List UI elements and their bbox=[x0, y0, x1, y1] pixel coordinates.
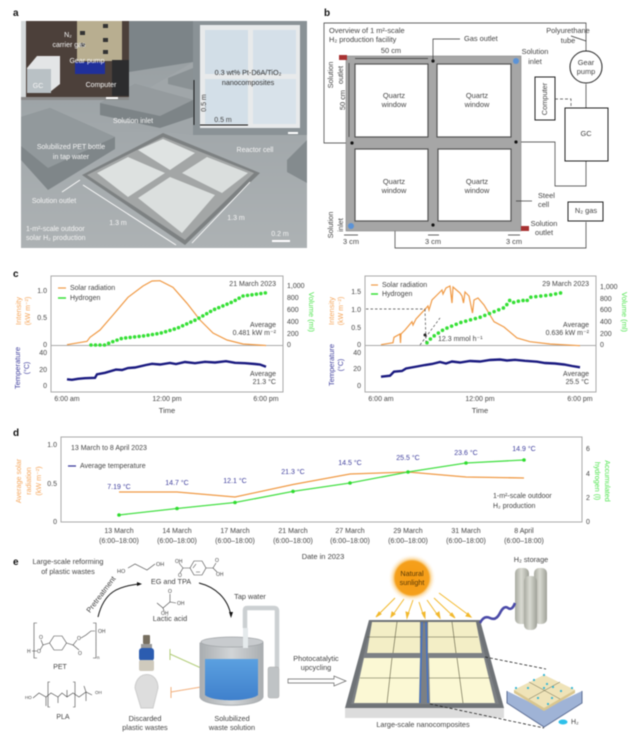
TPA molecule: OH bbox=[175, 559, 183, 565]
annotations: 21.3 °C bbox=[253, 378, 276, 386]
sun bbox=[388, 554, 436, 602]
inset: nanocomposite panel bbox=[193, 21, 307, 135]
annotations: Average temperature bbox=[80, 463, 146, 470]
labels: Quartz bbox=[383, 177, 405, 186]
inset: nanocomposite panel: 0.3 wt% Pt-D6A/TiO₂ bbox=[215, 68, 282, 77]
axes ticks: 1,000 bbox=[600, 284, 618, 291]
labels: 3 cm bbox=[506, 237, 522, 246]
temperature labels: 21.3 °C bbox=[281, 468, 305, 476]
panel b label: b bbox=[324, 8, 330, 19]
nanocomposite detail bbox=[507, 674, 582, 727]
labels: window bbox=[464, 100, 490, 109]
axes ticks: Time bbox=[472, 406, 488, 415]
PET structure: H bbox=[27, 649, 31, 655]
axes ticks: 6:00 pm bbox=[253, 396, 279, 403]
PLA structure: HO bbox=[25, 695, 32, 700]
gear pump: Gear bbox=[578, 58, 595, 67]
axes ticks: 27 March bbox=[335, 528, 365, 535]
PET structure: O bbox=[39, 635, 43, 641]
labels: Quartz bbox=[466, 177, 488, 186]
axes ticks: 400 bbox=[600, 319, 612, 326]
GC box: GC bbox=[580, 129, 592, 138]
annotations bbox=[58, 281, 277, 386]
annotations bbox=[371, 281, 590, 386]
annotations: Average bbox=[563, 322, 589, 329]
axes ticks: 0 bbox=[287, 342, 291, 349]
PET structure: O bbox=[37, 649, 41, 655]
inset: nanocomposite panel: 0.5 m bbox=[214, 117, 232, 124]
labels: 50 cm bbox=[381, 46, 401, 55]
axes ticks: 800 bbox=[600, 296, 612, 303]
annotations: 12.3 mmol h⁻¹ bbox=[438, 336, 483, 343]
annotations: 25.5 °C bbox=[566, 378, 589, 386]
axes ticks: (°C) bbox=[23, 362, 31, 374]
axes ticks: Temperature bbox=[13, 347, 22, 389]
axes ticks: 40 bbox=[353, 350, 361, 357]
annotations: Average bbox=[563, 371, 589, 378]
axes ticks: 21 March bbox=[278, 528, 308, 535]
photo labels: 1.3 m bbox=[227, 215, 245, 222]
annotations: Hydrogen bbox=[70, 295, 100, 302]
panel e: process scheme: H₂ storage bbox=[514, 555, 548, 564]
temperature labels: 7.19 °C bbox=[107, 483, 131, 491]
temperature trace bbox=[381, 360, 580, 377]
N2 gas box bbox=[568, 202, 603, 221]
arrow to solution bbox=[199, 583, 233, 618]
labels: Quartz bbox=[383, 91, 405, 100]
axes ticks: Intensity bbox=[14, 297, 23, 325]
labels bbox=[326, 26, 590, 246]
chart: daily averages bbox=[14, 437, 612, 561]
annotations: H₂ production bbox=[493, 503, 536, 510]
axes ticks: 600 bbox=[600, 307, 612, 314]
concrete blocks bbox=[21, 68, 307, 190]
axes ticks: 29 March bbox=[393, 528, 423, 535]
hollow arrow bbox=[288, 676, 346, 686]
computer box: Computer bbox=[540, 82, 549, 115]
axes ticks: 12:00 pm bbox=[465, 396, 495, 403]
axes ticks: Average solar bbox=[14, 458, 23, 503]
axes ticks: (6:00–18:00) bbox=[504, 538, 544, 545]
temperature labels: 12.1 °C bbox=[223, 477, 247, 485]
photo labels: 0.2 m bbox=[271, 231, 289, 238]
sun: sunlight bbox=[400, 578, 424, 587]
photo labels: 1.3 m bbox=[109, 220, 127, 227]
axes ticks: 400 bbox=[287, 319, 299, 326]
photo labels: solar H₂ production bbox=[26, 235, 86, 242]
axes ticks: 12:00 pm bbox=[152, 396, 182, 403]
photo labels: 1-m²-scale outdoor bbox=[26, 226, 85, 233]
axes ticks: 20 bbox=[39, 367, 47, 374]
solar radiation curve bbox=[67, 281, 266, 346]
labels: Solution bbox=[326, 212, 335, 238]
axes ticks: 8 April bbox=[514, 528, 534, 535]
solar line bbox=[119, 472, 524, 497]
panel e: process scheme: Discarded bbox=[129, 714, 161, 723]
H2 storage tanks bbox=[515, 568, 547, 630]
H2 legend: H₂ bbox=[571, 719, 579, 726]
axes ticks: 600 bbox=[287, 307, 299, 314]
axes ticks: Temperature bbox=[327, 344, 336, 386]
zoom dashes bbox=[430, 657, 546, 728]
axes ticks: 0 bbox=[43, 342, 47, 349]
EG molecule bbox=[117, 562, 164, 575]
axes ticks: Intensity bbox=[327, 297, 336, 325]
sun: Natural bbox=[400, 569, 424, 578]
lactic acid molecule bbox=[157, 589, 185, 617]
axes ticks: 1,000 bbox=[287, 283, 305, 290]
steel frame with panes bbox=[82, 133, 260, 245]
panel e: process scheme: Lactic acid bbox=[153, 614, 187, 623]
EG molecule: OH bbox=[156, 562, 164, 568]
GC box bbox=[565, 108, 608, 161]
axes ticks: 17 March bbox=[220, 528, 250, 535]
steel cell bbox=[346, 56, 521, 231]
labels: Solution bbox=[531, 219, 557, 228]
axes ticks: (°C) bbox=[337, 359, 345, 371]
labels: tube bbox=[561, 36, 575, 45]
axes ticks: 0 bbox=[586, 519, 590, 526]
lactic acid molecule: OH bbox=[177, 601, 185, 607]
axes ticks: 800 bbox=[287, 295, 299, 302]
chart: 21 March 2023 bbox=[13, 276, 316, 415]
temperature labels: 14.9 °C bbox=[512, 445, 536, 453]
axes ticks: 4 bbox=[586, 471, 590, 478]
axes ticks: Accumulated bbox=[603, 460, 612, 502]
axes ticks: 0 bbox=[43, 383, 47, 390]
axes ticks bbox=[13, 283, 316, 415]
labels: Steel bbox=[538, 191, 555, 200]
PET structure: O bbox=[77, 636, 81, 642]
PET structure: O bbox=[78, 651, 82, 657]
axes ticks: 0.5 bbox=[351, 325, 361, 332]
inset: gas chromatography setup: carrier gas bbox=[52, 42, 86, 49]
panel e label: e bbox=[13, 557, 19, 568]
axes ticks bbox=[327, 284, 629, 415]
axes ticks: 6 bbox=[586, 446, 590, 453]
axes ticks: (kW m⁻²) bbox=[34, 466, 43, 496]
PLA structure bbox=[25, 682, 102, 707]
axes ticks: 1.5 bbox=[351, 289, 361, 296]
panel e: process scheme: of plastic wastes bbox=[41, 567, 95, 576]
labels: 50 cm bbox=[338, 90, 347, 110]
labels: Gas outlet bbox=[464, 34, 498, 43]
axes ticks: (kW m⁻²) bbox=[338, 297, 345, 325]
axes ticks: 40 bbox=[39, 350, 47, 357]
panel e: process scheme: Tap water bbox=[234, 592, 266, 601]
panel e: process scheme: plastic wastes bbox=[122, 723, 168, 732]
axes ticks: (6:00–18:00) bbox=[330, 538, 370, 545]
annotations: Hydrogen bbox=[382, 291, 412, 298]
labels: Overview of 1 m²-scale bbox=[329, 26, 405, 35]
chart: 29 March 2023 bbox=[327, 276, 629, 415]
axes ticks: 31 March bbox=[451, 528, 481, 535]
temperature labels: 25.5 °C bbox=[396, 454, 420, 462]
labels: window bbox=[464, 186, 490, 195]
axes ticks: 13 March bbox=[104, 528, 134, 535]
PET structure: n bbox=[97, 655, 100, 660]
axes ticks: 20 bbox=[353, 366, 361, 373]
dashed guides bbox=[366, 309, 440, 345]
axes ticks: (6:00–18:00) bbox=[273, 538, 313, 545]
panel a label: a bbox=[13, 8, 19, 19]
temperature trace bbox=[67, 361, 266, 380]
axes ticks: 2 bbox=[586, 495, 590, 502]
panel e: process scheme: PET bbox=[53, 664, 68, 671]
panel b: facility schematic bbox=[324, 23, 608, 248]
axes ticks: 14 March bbox=[162, 528, 192, 535]
computer box bbox=[535, 77, 555, 120]
photo labels bbox=[26, 118, 290, 245]
TPA molecule: O bbox=[215, 558, 219, 564]
panel e: process scheme: PLA bbox=[56, 714, 70, 721]
TPA molecule: OH bbox=[216, 572, 224, 578]
axes ticks: (6:00–18:00) bbox=[157, 538, 197, 545]
panel c label: c bbox=[13, 269, 19, 280]
N2 gas box: N₂ gas bbox=[575, 206, 597, 215]
panel a: outdoor reactor photograph bbox=[21, 21, 307, 248]
axes ticks: 1.0 bbox=[351, 307, 361, 314]
labels: window bbox=[381, 100, 407, 109]
PLA structure: OH bbox=[95, 690, 102, 695]
labels: inlet bbox=[528, 57, 542, 66]
photo labels: Solution inlet bbox=[113, 118, 153, 125]
tubing bbox=[324, 23, 586, 248]
panel e: process scheme: Large-scale nanocomposites bbox=[376, 720, 470, 729]
annotations: Average bbox=[250, 322, 276, 329]
panel e: process scheme: Solubilized bbox=[214, 714, 250, 723]
axes ticks: (kW m⁻²) bbox=[25, 297, 32, 325]
TPA molecule: O bbox=[178, 573, 182, 579]
axes ticks: 0.5 bbox=[47, 481, 57, 488]
annotations: 0.481 kW m⁻² bbox=[233, 330, 277, 337]
axes ticks: (6:00–18:00) bbox=[99, 538, 139, 545]
purple tube bbox=[480, 603, 515, 623]
inset: gas chromatography setup: Gear pump bbox=[69, 58, 105, 65]
labels: H₂ production facility bbox=[329, 35, 397, 44]
annotations: 0.636 kW m⁻² bbox=[546, 330, 590, 337]
axes ticks: 200 bbox=[600, 331, 612, 338]
axes ticks: hydrogen (l) bbox=[593, 462, 602, 500]
lactic acid molecule: OH bbox=[161, 611, 169, 617]
temperature labels: 14.5 °C bbox=[338, 459, 362, 467]
annotations: Solar radiation bbox=[382, 282, 427, 289]
pretreatment arrow bbox=[84, 574, 142, 617]
labels: cell bbox=[538, 200, 549, 209]
annotations: 1-m²-scale outdoor bbox=[493, 493, 552, 500]
axes ticks: 0 bbox=[357, 383, 361, 390]
H2 legend bbox=[558, 719, 579, 726]
annotations bbox=[68, 445, 552, 510]
inset: nanocomposite panel: 0.5 m bbox=[201, 94, 208, 112]
axes ticks: 6:00 pm bbox=[567, 396, 593, 403]
labels: inlet bbox=[336, 218, 345, 232]
PET structure: OH bbox=[98, 629, 106, 635]
labels: 3 cm bbox=[343, 237, 359, 246]
axes ticks bbox=[14, 442, 612, 561]
beaker with blue solution bbox=[200, 637, 263, 705]
tap bbox=[243, 608, 279, 698]
axes ticks: 0 bbox=[357, 342, 361, 349]
panel e: process scheme: Photocatalytic bbox=[293, 654, 339, 663]
hydrogen line bbox=[117, 458, 526, 517]
quartz windows bbox=[355, 64, 511, 221]
photo labels: Solubilized PET bottle bbox=[37, 144, 105, 151]
annotations: 29 March 2023 bbox=[542, 281, 589, 288]
EG molecule: HO bbox=[117, 569, 126, 575]
inset: gas chromatography setup: N₂ bbox=[64, 32, 72, 39]
axes ticks: (6:00–18:00) bbox=[446, 538, 486, 545]
photo labels: in tap water bbox=[53, 154, 90, 161]
axes ticks: radiation bbox=[24, 467, 33, 495]
axes ticks: 0 bbox=[53, 519, 57, 526]
solar radiation curve bbox=[381, 286, 580, 346]
panel e: process scheme: waste solution bbox=[208, 723, 255, 732]
axes ticks: (6:00–18:00) bbox=[215, 538, 255, 545]
hydrogen dots bbox=[91, 293, 267, 345]
photo labels: Reactor cell bbox=[237, 147, 274, 154]
TPA molecule bbox=[175, 558, 224, 579]
temperature labels bbox=[107, 445, 536, 491]
labels: Quartz bbox=[466, 91, 488, 100]
panel e: process scheme: Large-scale reforming bbox=[33, 557, 103, 566]
inset: gas chromatography setup bbox=[21, 21, 129, 100]
labels: Polyurethane bbox=[546, 26, 590, 35]
axes ticks: 1.0 bbox=[47, 442, 57, 449]
axes ticks: 6:00 am bbox=[368, 396, 394, 403]
inset: nanocomposite panel: nanocomposites bbox=[222, 78, 275, 87]
axes ticks: Volume (ml) bbox=[620, 292, 629, 333]
labels: outlet bbox=[336, 66, 345, 84]
axes ticks: 6:00 am bbox=[54, 396, 80, 403]
inset: gas chromatography setup: Computer bbox=[86, 82, 117, 89]
axes ticks: (6:00–18:00) bbox=[388, 538, 428, 545]
labels: 3 cm bbox=[425, 237, 441, 246]
inlets and outlets bbox=[339, 55, 529, 231]
labels: Solution bbox=[326, 62, 335, 88]
inset: gas chromatography setup: GC bbox=[33, 83, 43, 90]
sun rays bbox=[376, 593, 471, 618]
panel d label: d bbox=[13, 428, 19, 439]
PET structure bbox=[27, 623, 106, 660]
axes ticks: 1.0 bbox=[37, 288, 47, 295]
axes ticks: 200 bbox=[287, 331, 299, 338]
photo labels: Solution outlet bbox=[32, 198, 76, 205]
annotations: Average bbox=[250, 371, 276, 378]
temperature labels: 23.6 °C bbox=[454, 449, 478, 457]
panel e: process scheme bbox=[25, 554, 582, 732]
labels: Solution bbox=[522, 47, 548, 56]
labels: outlet bbox=[535, 228, 553, 237]
large scale nanocomposite panel bbox=[345, 620, 504, 718]
discarded cup bbox=[135, 674, 158, 708]
annotations: Solar radiation bbox=[70, 285, 115, 292]
annotations: 21 March 2023 bbox=[229, 281, 276, 288]
discarded bottle bbox=[139, 635, 154, 671]
lactic acid molecule: O bbox=[168, 589, 172, 595]
panel e: process scheme: upcycling bbox=[301, 663, 331, 672]
labels: window bbox=[381, 186, 407, 195]
axes ticks: Volume (ml) bbox=[307, 292, 316, 333]
axes ticks: 0.5 bbox=[37, 315, 47, 322]
panel e: process scheme: EG and TPA bbox=[151, 577, 191, 586]
axes ticks: 0 bbox=[600, 342, 604, 349]
inhibition lines bbox=[170, 649, 201, 668]
gear pump: pump bbox=[577, 67, 595, 76]
hydrogen dots bbox=[427, 292, 564, 343]
pretreatment arrow: Pretreatment bbox=[84, 574, 118, 615]
axes ticks: Date in 2023 bbox=[302, 552, 344, 561]
annotations: 13 March to 8 April 2023 bbox=[71, 445, 147, 452]
temperature labels: 14.7 °C bbox=[165, 479, 189, 487]
gear pump bbox=[570, 51, 602, 83]
axes ticks: Time bbox=[159, 406, 175, 415]
